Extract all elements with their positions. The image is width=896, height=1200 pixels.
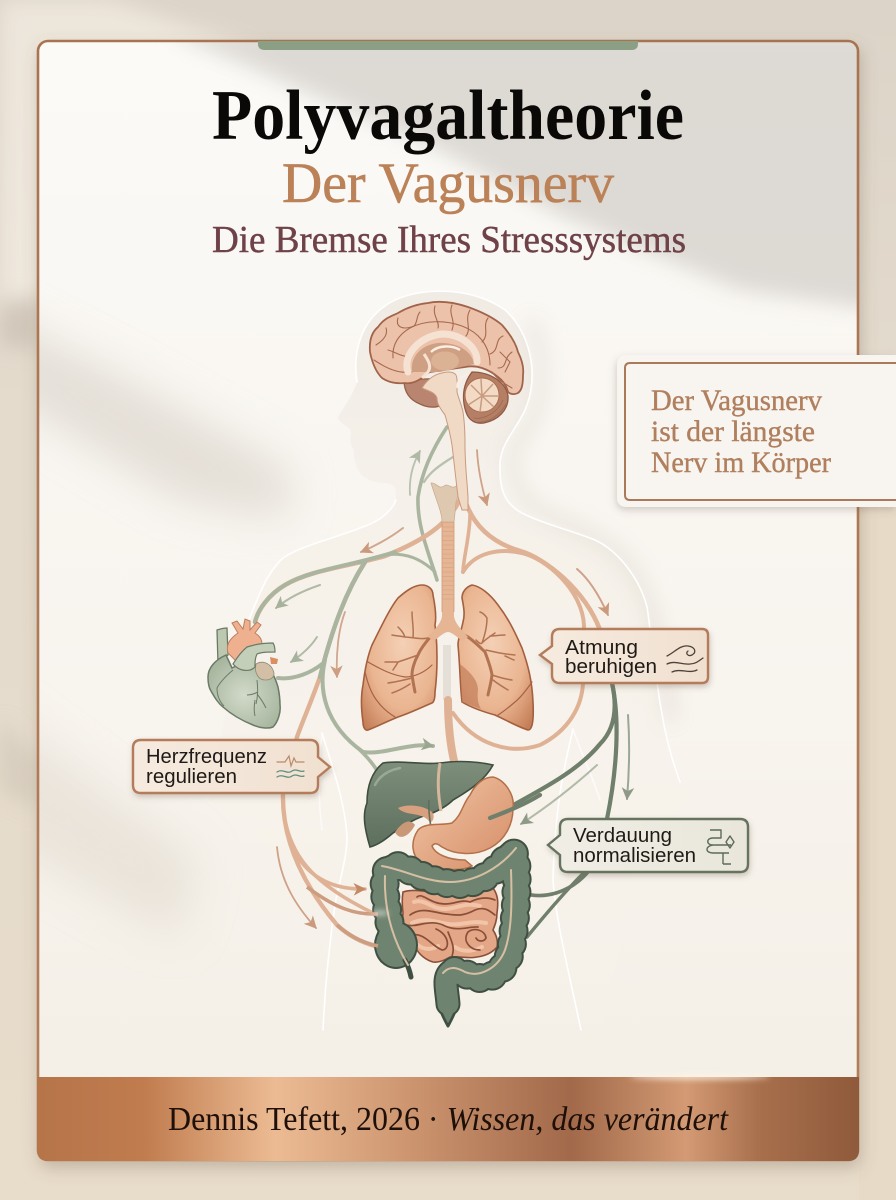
green top tab [258,41,638,50]
icon: lungs [362,585,533,730]
callout: longest nerve [617,355,896,507]
nerve terminals on colon [307,887,378,946]
callout: digestion: Verdauung [573,825,672,847]
glint on colon [371,911,389,915]
callout: heart rate [133,740,330,793]
thalamus [431,352,459,370]
icon: brain [370,302,523,510]
callout: digestion [548,819,748,872]
nerve: left trunk [283,562,375,946]
subtitle: Der Vagusnerv [282,152,614,215]
icon: heart [208,619,280,728]
nerve: left branch to heart [255,495,462,622]
tagline: Die Bremse Ihres Stresssystems [212,219,686,261]
heart body [208,655,280,728]
arrow: chest left [361,528,403,552]
bronchial tree right [448,612,515,695]
icon: heartbeat waves [277,756,304,777]
icon: stomach [413,777,513,869]
icon: liver [364,762,493,847]
callout: heart rate: Herzfrequenz [146,746,267,768]
arrow: centre down [337,612,345,677]
icon: small intestine [402,888,498,962]
lower dark temporal [404,378,446,407]
nerve: green neck strands [418,427,447,580]
arrow: right abdomen [627,715,629,799]
footer bar: Dennis Tefett, 2026 · Wissen, das verändert [168,1101,729,1138]
bronchial tree left [385,612,448,693]
aorta [227,619,262,665]
body silhouette [210,291,690,1040]
nerve: central lower trunk [443,645,451,700]
arrow: neck down [477,450,487,505]
arrow: to heart [291,637,317,662]
inner dark region [412,343,474,372]
arrow: to stomach [521,765,597,824]
brainstem and main vagus [422,372,468,510]
lung fold shading [460,664,481,709]
cerebellum [465,378,499,412]
callout: breathing: Atmung [565,637,638,659]
pulmonary vessel [233,643,275,670]
coronary veins [217,670,266,716]
callout: longest nerve: Nerv im Körper [651,446,831,479]
cerebrum [370,302,523,394]
callout: longest nerve: ist der längste [651,415,815,448]
lobe lines [365,662,532,717]
corpus callosum [407,334,477,372]
icon: trachea and larynx [428,483,468,641]
callout: heart rate: regulieren [146,766,237,788]
green vessel [217,628,228,664]
nerve: right branches [464,497,600,630]
icon: colon [374,848,517,1026]
intestine loops [405,896,495,956]
callout: breathing: beruhigen [565,656,657,678]
arrow: lower left [277,847,316,928]
gyri [374,305,512,372]
nerve: heart link [278,664,322,678]
icon: intestine [707,830,734,864]
arrow: to shoulder left [276,585,320,608]
callout: breathing [540,629,708,683]
cerebellum back [464,372,508,423]
nerve: vagus to stomach [490,683,615,818]
callout: longest nerve: Der Vagusnerv [651,384,822,417]
faded direction arrows [276,450,629,928]
nerve: to liver and gut [323,660,433,752]
title: Polyvagaltheorie [212,77,684,155]
nerve end on stomach [490,795,540,818]
arrow: right shoulder [577,569,608,615]
nerve branches [255,427,617,946]
tan atrium [255,662,274,680]
icon: wave [667,646,703,672]
footer bar [37,1074,859,1161]
arrow: neck up [410,451,420,495]
callout: digestion: normalisieren [573,845,696,867]
